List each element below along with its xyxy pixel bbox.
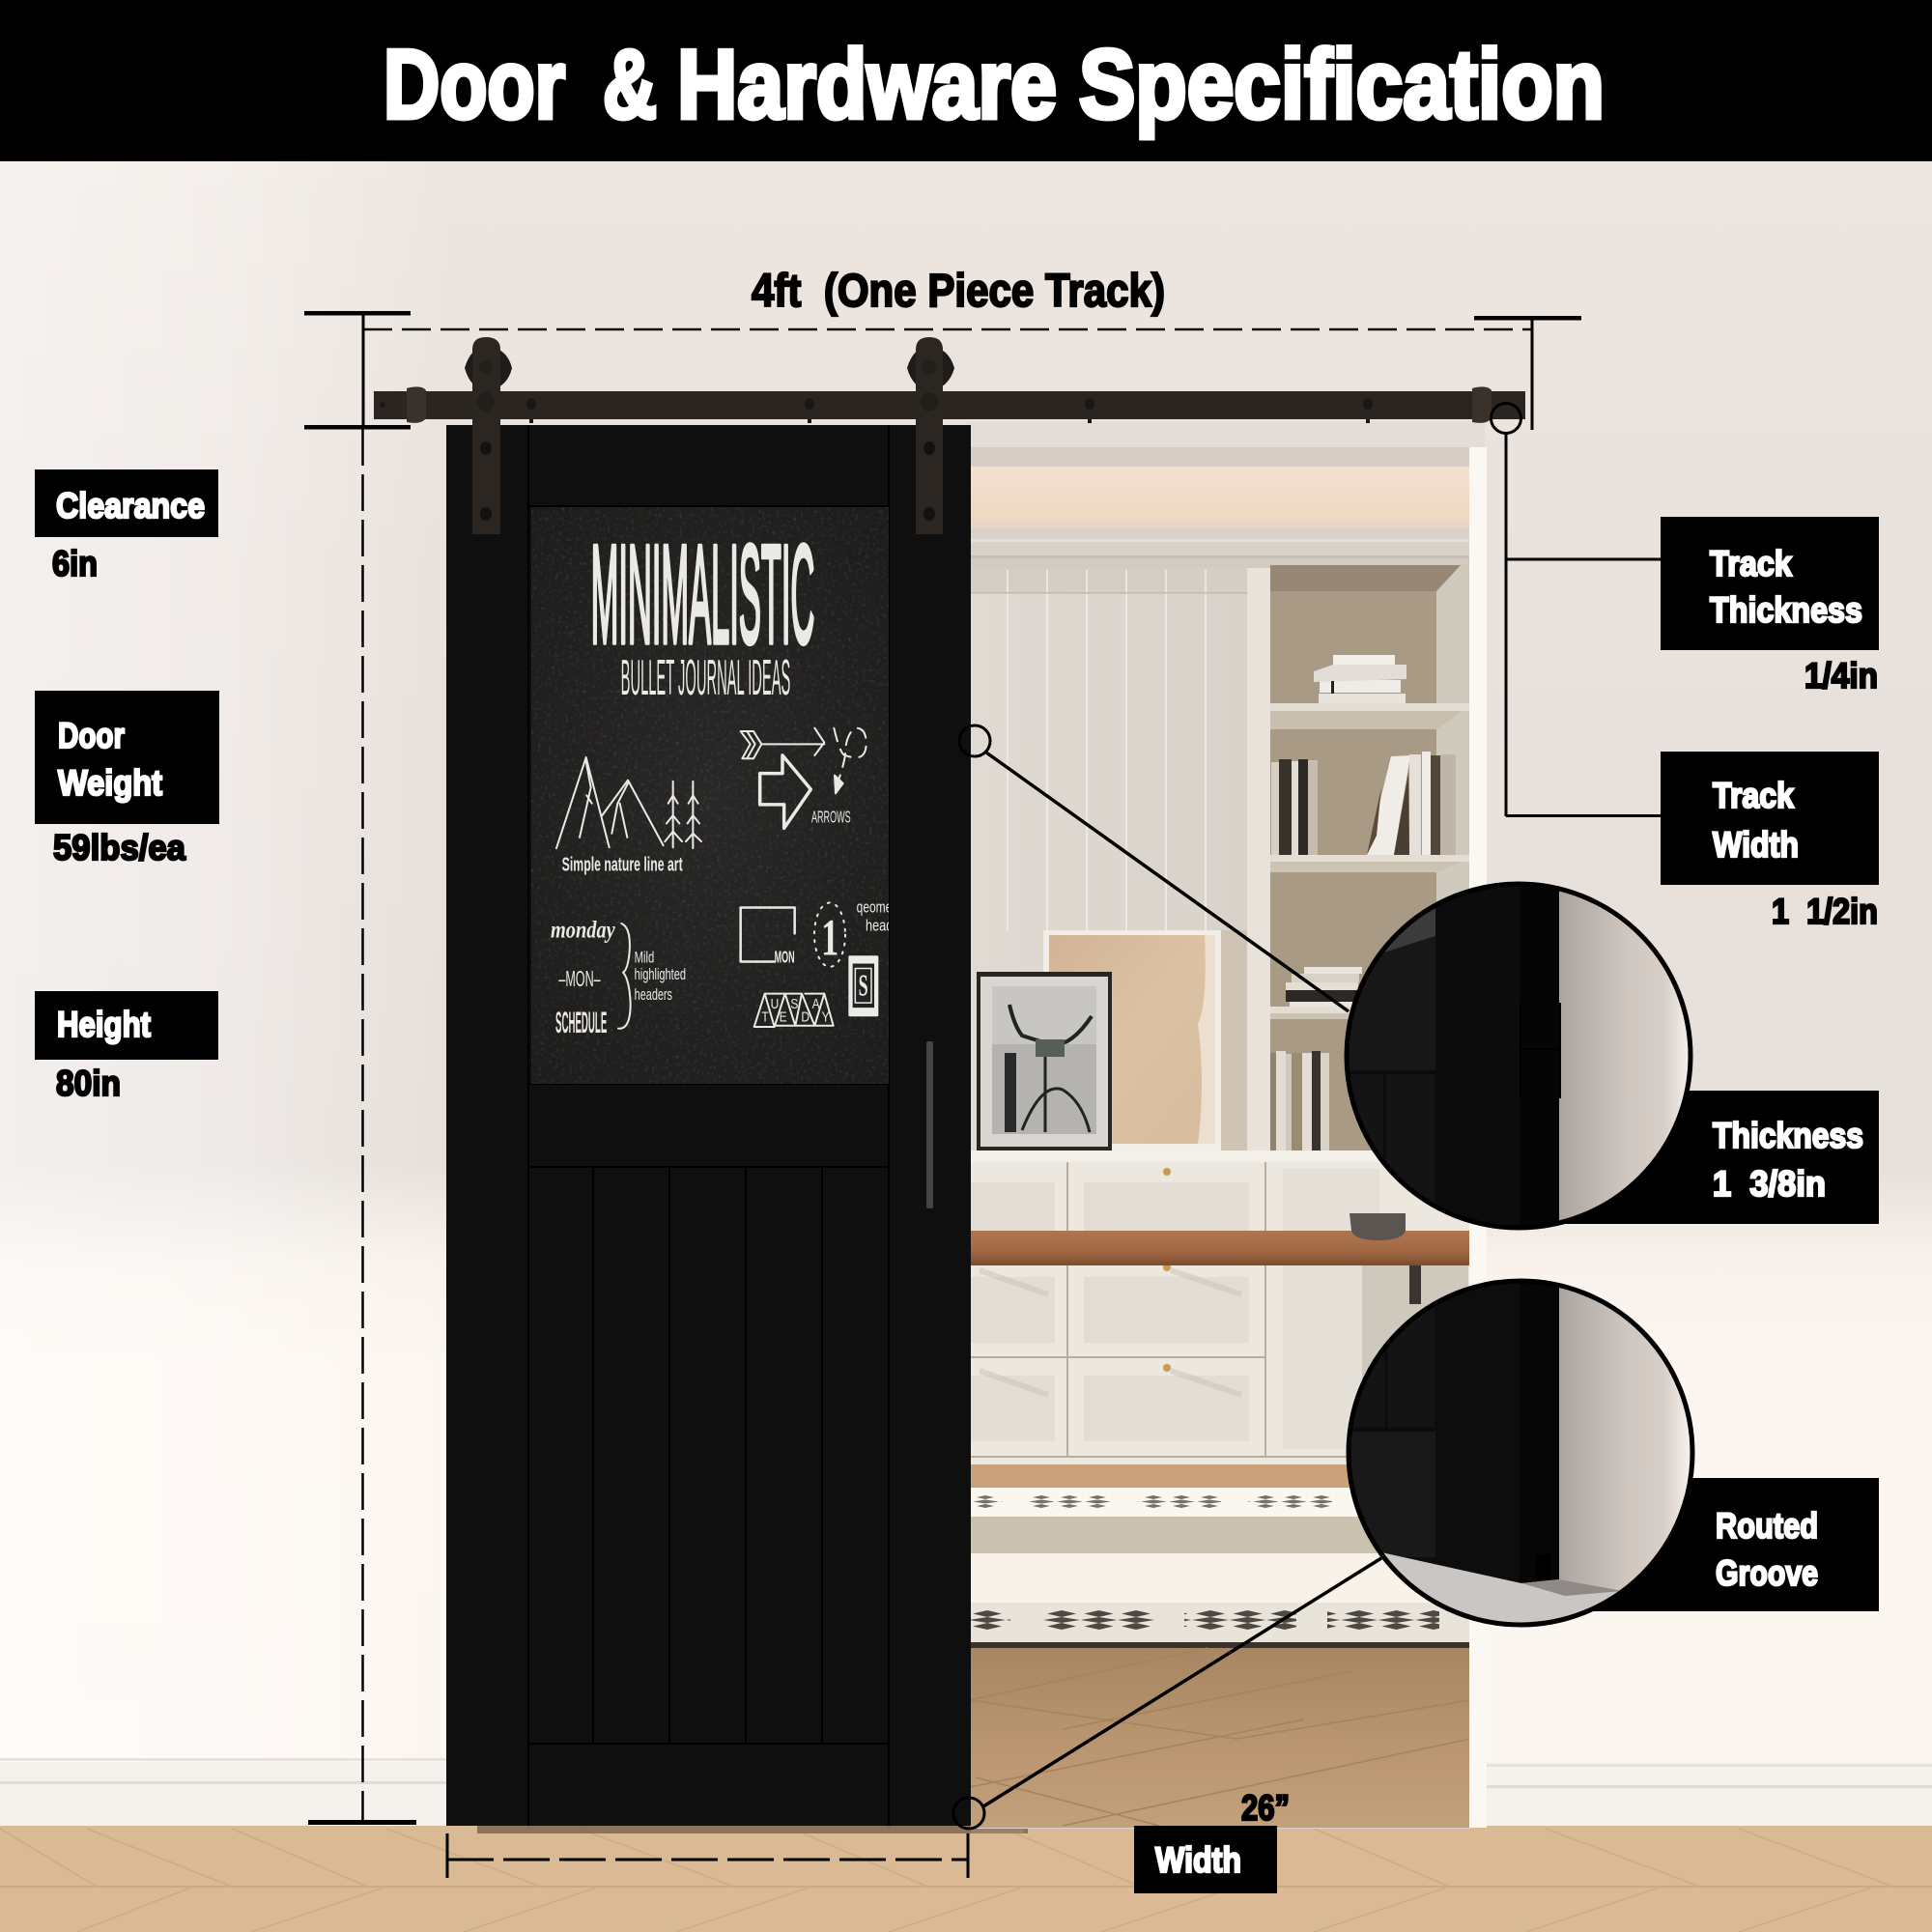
label: track thickness [1661, 517, 1879, 696]
front floor in doorway [970, 1648, 1470, 1828]
label: routed groove: Groove [1716, 1553, 1818, 1593]
dimension: track length [304, 266, 1581, 430]
magnifier: routed groove detail [1343, 1275, 1700, 1633]
dimension: door height [304, 425, 416, 1825]
chalk clipped note: head [866, 917, 893, 935]
upper panel [1343, 936, 1435, 1070]
label: width: Width [1155, 1840, 1241, 1880]
chalk caption: arrows: ARROWS [811, 809, 851, 827]
label: track width: Width [1713, 825, 1799, 865]
room seen through the doorway [970, 447, 1487, 1829]
gray top wedge [1384, 908, 1435, 952]
label: door weight [35, 691, 219, 867]
chalk S badge: S [859, 970, 868, 1003]
chalk brace [618, 923, 631, 1029]
lower rail [1343, 1432, 1435, 1557]
title banner [0, 0, 1932, 161]
chalk pennant banner: Y [822, 1009, 830, 1025]
title: Hardware [677, 31, 1057, 139]
label: track thickness: 1/4in [1804, 656, 1878, 696]
warm ceiling glow [970, 467, 1469, 528]
label: thickness: Thickness [1713, 1116, 1863, 1155]
door handle [926, 1041, 933, 1208]
hinge mark [1559, 1003, 1561, 1098]
chalk numeral [814, 903, 845, 967]
crown moulding [970, 528, 1469, 568]
chalk pennant banner: A [812, 996, 820, 1011]
books [1270, 655, 1456, 1151]
chalk note: headers [635, 986, 672, 1004]
label: height: Height [57, 1005, 151, 1044]
door jamb [1469, 447, 1487, 1828]
label: routed groove [1565, 1478, 1879, 1611]
soffit [970, 447, 1485, 467]
label: track width: 1 1/2in [1772, 892, 1878, 931]
planked wall [970, 568, 1270, 1151]
chalk pennant banner: S [790, 996, 798, 1011]
barn door: MINIMALISTIC [591, 516, 814, 672]
chalk box header: MON [775, 949, 795, 967]
chalk caption: nature: Simple nature line art [562, 853, 683, 875]
chalk pennant banner [754, 994, 834, 1027]
chalk note: Mild [635, 949, 654, 967]
floor [1383, 1553, 1617, 1623]
chalk pennant banner: D [801, 1009, 810, 1025]
bowl [1350, 1213, 1406, 1240]
chalk clipped note [857, 904, 889, 931]
callout lines: track marker [1492, 404, 1662, 816]
label: clearance: Clearance [56, 486, 205, 526]
rug [970, 1488, 1470, 1648]
chalk mon: –MON– [558, 967, 601, 992]
chalk S badge [848, 955, 878, 1016]
label: door weight: 59lbs/ea [53, 828, 185, 867]
chalk headers: monday [551, 917, 615, 944]
upper left panels [1343, 1275, 1435, 1428]
baseboards [0, 1758, 1932, 1828]
rear floor [970, 1464, 1470, 1488]
chalk pennant banner: E [780, 1009, 787, 1025]
left stopper [407, 386, 426, 423]
rail [374, 391, 1525, 419]
chalk note: highlighted [635, 966, 686, 984]
rail bolts [380, 398, 1373, 423]
label: door weight: Weight [58, 763, 162, 803]
label: thickness: 1 3/8in [1713, 1164, 1826, 1204]
groove notch [1536, 1554, 1550, 1579]
track length label: 4ft (One Piece Track) [752, 266, 1165, 317]
marker: door edge thickness [959, 725, 1349, 1011]
chalk note [635, 951, 686, 1000]
label: clearance [35, 469, 218, 583]
label: width [1134, 1788, 1290, 1893]
framed prints [977, 930, 1221, 1151]
label: height: 80in [56, 1064, 121, 1103]
label: track width [1661, 752, 1879, 931]
right stopper [1472, 386, 1492, 423]
lower left panels [1350, 1074, 1435, 1203]
marker: door bottom groove [953, 1558, 1381, 1829]
label: track thickness: Track [1710, 544, 1792, 583]
panel seams [528, 425, 889, 1826]
barn door hardware [374, 337, 1525, 534]
title: Door [384, 31, 565, 139]
label: routed groove: Routed [1716, 1506, 1818, 1546]
chalk mountains and trees [556, 757, 701, 848]
floor: light herringbone wood [0, 1797, 1932, 1932]
cabinets [970, 1151, 1470, 1464]
chalkboard panel [531, 507, 893, 1084]
chalk arrows [741, 728, 824, 758]
wood countertop [970, 1231, 1470, 1265]
label: thickness [1546, 1091, 1879, 1224]
chalkboard panel: BULLET JOURNAL IDEAS [621, 649, 790, 705]
chalk pennant banner: U [771, 996, 779, 1011]
chalkboard panel: SCHEDULE [555, 1006, 607, 1040]
bookcase [1270, 565, 1470, 1151]
door edge [1520, 879, 1559, 1232]
title: & [603, 31, 657, 139]
right hanger [907, 337, 954, 534]
dimension: door width [446, 1833, 970, 1878]
door edge [1520, 1275, 1559, 1584]
chalk pennant banner: T [761, 1009, 769, 1025]
chalk box header [741, 907, 795, 967]
label: height [35, 991, 218, 1103]
label: clearance: 6in [52, 544, 98, 583]
chalk numeral: 1 [821, 908, 838, 967]
label: door weight: Door [58, 716, 125, 755]
title: Specification [1079, 31, 1605, 139]
label: track thickness: Thickness [1710, 590, 1862, 630]
label: width: 26” [1241, 1788, 1290, 1828]
left hanger [465, 337, 512, 534]
chalk clipped note: qeome [857, 898, 892, 917]
magnifier: door edge detail [1343, 879, 1694, 1232]
barn door [446, 425, 971, 1826]
title [384, 31, 1605, 139]
label: track width: Track [1713, 776, 1794, 815]
